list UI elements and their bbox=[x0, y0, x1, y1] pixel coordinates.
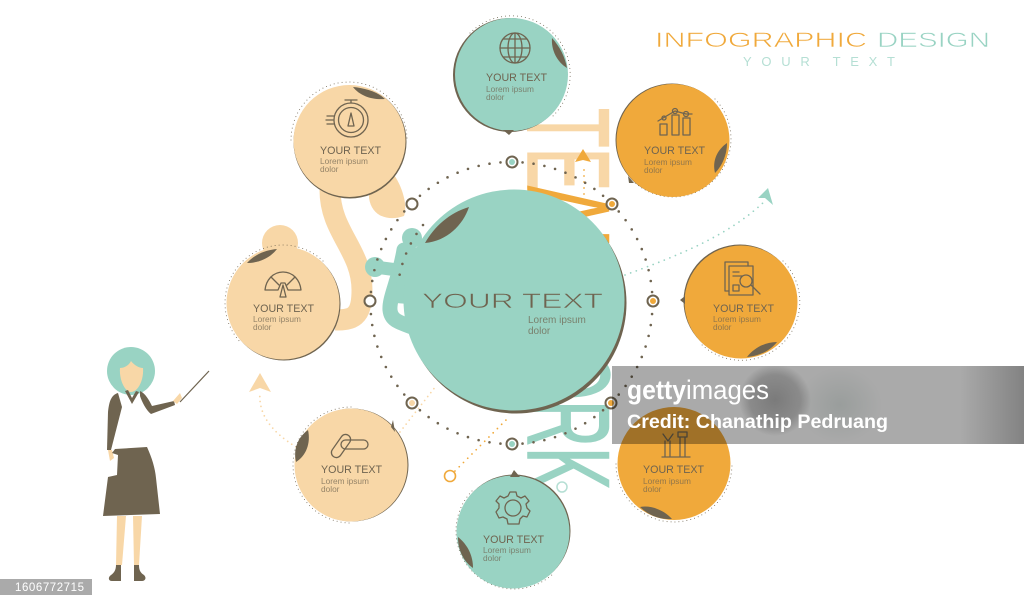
watermark band: images bbox=[686, 375, 769, 405]
icon: chain links bbox=[329, 432, 368, 460]
panel: top-left peach circle: dolor bbox=[320, 164, 339, 174]
panel: top-right orange circle bbox=[616, 84, 731, 197]
panel: top teal circle: Lorem ipsum bbox=[486, 84, 534, 94]
panel: top-left peach circle: Lorem ipsum bbox=[320, 156, 368, 166]
panel: top teal circle: dolor bbox=[486, 92, 505, 102]
panel: top teal circle: YOUR TEXT bbox=[486, 72, 547, 84]
panel: bottom-left peach circle: Lorem ipsum bbox=[321, 476, 369, 486]
arrows: dotted flow lines bbox=[249, 149, 773, 492]
title: infographic design: DESIGN bbox=[877, 29, 990, 52]
panel: bottom teal circle: dolor bbox=[483, 553, 502, 563]
main circle: your text: Lorem ipsum bbox=[528, 315, 586, 326]
panel: top teal circle bbox=[453, 16, 570, 135]
icon: gear bbox=[496, 492, 530, 524]
panel: bottom-right orange circle: YOUR TEXT bbox=[643, 464, 704, 476]
icon: stopwatch bbox=[326, 100, 368, 137]
title: infographic design bbox=[655, 29, 990, 69]
connector: peach s-curve bbox=[262, 172, 405, 320]
panel: top-right orange circle: Lorem ipsum bbox=[644, 157, 692, 167]
dotted orbit rings bbox=[370, 162, 652, 444]
panel: bottom-left peach circle: YOUR TEXT bbox=[321, 464, 382, 476]
image id tag: 1606772715 bbox=[15, 582, 84, 594]
main circle: your text: YOUR TEXT bbox=[422, 290, 603, 313]
panel: right orange circle: dolor bbox=[713, 322, 732, 332]
title: infographic design: INFOGRAPHIC bbox=[655, 29, 867, 52]
watermark band bbox=[612, 364, 1024, 444]
icon: gauge bbox=[265, 272, 301, 297]
panel: bottom teal circle: Lorem ipsum bbox=[483, 545, 531, 555]
icon: globe bbox=[500, 33, 530, 63]
panel: bottom teal circle bbox=[456, 470, 570, 589]
panel: bottom teal circle: YOUR TEXT bbox=[483, 534, 544, 546]
watermark band: Credit: Chanathip Pedruang bbox=[627, 411, 888, 433]
panel: bottom-left peach circle: dolor bbox=[321, 484, 340, 494]
icon: bar chart bbox=[658, 108, 692, 135]
panel: bottom-right orange circle: Lorem ipsum bbox=[643, 476, 691, 486]
panel: right orange circle: YOUR TEXT bbox=[713, 303, 774, 315]
panel: top-left peach circle: YOUR TEXT bbox=[320, 145, 381, 157]
panel: left peach circle: YOUR TEXT bbox=[253, 303, 314, 315]
icon: columns bbox=[662, 432, 690, 457]
panel: left peach circle: dolor bbox=[253, 322, 272, 332]
figure: presenter woman bbox=[103, 347, 209, 581]
main circle: your text: dolor bbox=[528, 326, 551, 337]
panel: top-right orange circle: YOUR TEXT bbox=[644, 145, 705, 157]
panel: right orange circle bbox=[680, 244, 800, 360]
main circle: your text bbox=[365, 190, 626, 414]
teal knot bbox=[365, 228, 425, 327]
panel: left peach circle: Lorem ipsum bbox=[253, 314, 301, 324]
panel: top-right orange circle: dolor bbox=[644, 165, 663, 175]
ring nodes bbox=[364, 156, 658, 450]
panel: left peach circle bbox=[225, 245, 340, 360]
icon: documents and magnifier bbox=[725, 262, 760, 295]
panel: bottom-right orange circle: dolor bbox=[643, 484, 662, 494]
title: infographic design: YOUR TEXT bbox=[743, 54, 895, 69]
panel: top-left peach circle bbox=[291, 82, 407, 198]
panel: right orange circle: Lorem ipsum bbox=[713, 314, 761, 324]
panel: bottom-left peach circle bbox=[293, 407, 408, 523]
vertical word: teamwork: TEAM WORK bbox=[502, 108, 633, 490]
image id tag bbox=[0, 579, 92, 595]
panel: bottom-right orange circle bbox=[616, 407, 732, 522]
watermark band: getty bbox=[627, 375, 686, 405]
